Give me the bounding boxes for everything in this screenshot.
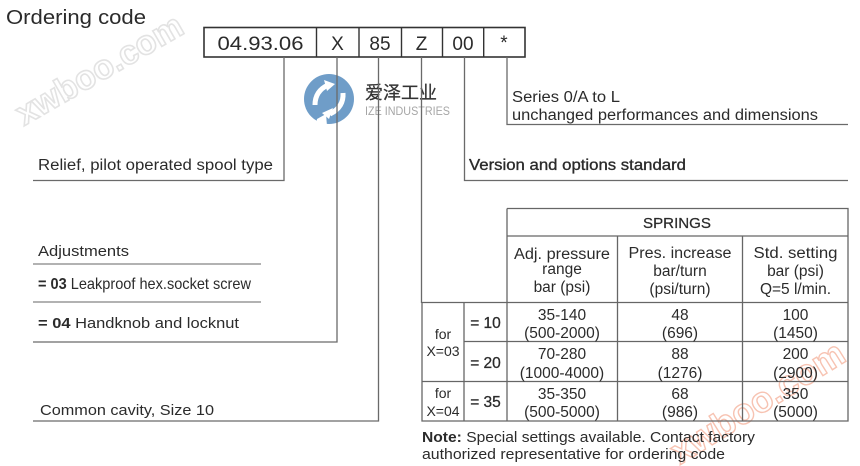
watermark: left: xwboo.com [9,7,190,133]
connector: cavity size [33,57,378,421]
column: standard setting: (1450) [773,325,818,342]
column: standard setting: bar (psi) [767,263,824,280]
column: pressure increase: (986) [662,404,698,421]
column: adjustable pressure: (500-2000) [524,325,600,342]
column: adjustable pressure: Adj. pressure [514,246,610,263]
logo: IZE Industries: 爱泽工业 [365,83,437,103]
column: standard setting: 200 [783,346,809,363]
code box: * [500,33,508,54]
column: pressure increase: 88 [671,346,689,363]
column: pressure increase [628,245,732,421]
text: spool type: Relief, pilot operated spool type [38,157,273,174]
row labels: for [435,326,452,342]
column: adjustable pressure: 35-140 [538,307,587,324]
code box: 00 [452,34,474,55]
adjustments list: = 04 Handknob and locknut [38,315,240,332]
row labels: X=03 [426,343,460,359]
column: adjustable pressure: bar (psi) [534,279,590,296]
text: series [512,89,818,124]
column: pressure increase: 68 [671,386,689,403]
table: springs: SPRINGS [643,215,711,232]
column: standard setting: Std. setting [754,245,838,262]
column: adjustable pressure: (500-5000) [524,404,600,421]
column: pressure increase: 48 [671,307,689,324]
row labels [426,315,501,419]
connector: spool type [33,57,284,180]
connector: adjustments [33,57,337,342]
adjustments list [33,243,261,332]
note [422,429,756,463]
column: standard setting: 100 [783,307,809,324]
code box [204,28,525,57]
code box: 85 [369,34,391,55]
note: Note: Special settings available. Contact factory [422,429,756,446]
row labels: X=04 [426,403,460,419]
logo: IZE Industries [304,74,450,126]
text: series: unchanged performances and dimensions [512,107,818,124]
row labels: for [435,385,452,401]
column: adjustable pressure: 35-350 [538,386,587,403]
column: standard setting: (5000) [773,404,818,421]
title: Ordering code [6,7,146,29]
text: series: Series 0/A to L [512,89,620,106]
column: pressure increase: Pres. increase [628,245,732,262]
code box: X [331,34,344,55]
code box: 04.93.06 [218,34,304,55]
column: pressure increase: bar/turn [653,263,707,280]
connector: version [464,57,848,180]
logo: IZE Industries: IZE INDUSTRIES [365,104,450,118]
column: pressure increase: (psi/turn) [649,281,711,298]
adjustments list: = 03 Leakproof hex.socket screw [38,276,251,293]
text: version: Version and options standard [469,157,686,174]
column: adjustable pressure [514,246,610,421]
row labels: = 20 [470,355,501,372]
text: cavity: Common cavity, Size 10 [40,402,214,419]
code box: Z [416,34,428,55]
column: pressure increase: (1276) [658,365,702,382]
row labels: = 35 [470,394,501,411]
column: standard setting: (2900) [773,365,818,382]
note: authorized representative for ordering code [422,446,725,463]
connector: series [507,57,848,124]
adjustments list: Adjustments [38,243,129,260]
row labels: = 10 [470,315,501,332]
column: standard setting: 350 [783,386,809,403]
column: adjustable pressure: (1000-4000) [520,365,604,382]
connector: springs [420,57,422,303]
table: springs [422,208,848,421]
column: adjustable pressure: 70-280 [538,346,587,363]
column: standard setting [754,245,838,421]
column: pressure increase: (696) [662,325,698,342]
column: standard setting: Q=5 l/min. [760,281,831,298]
column: adjustable pressure: range [542,261,582,278]
